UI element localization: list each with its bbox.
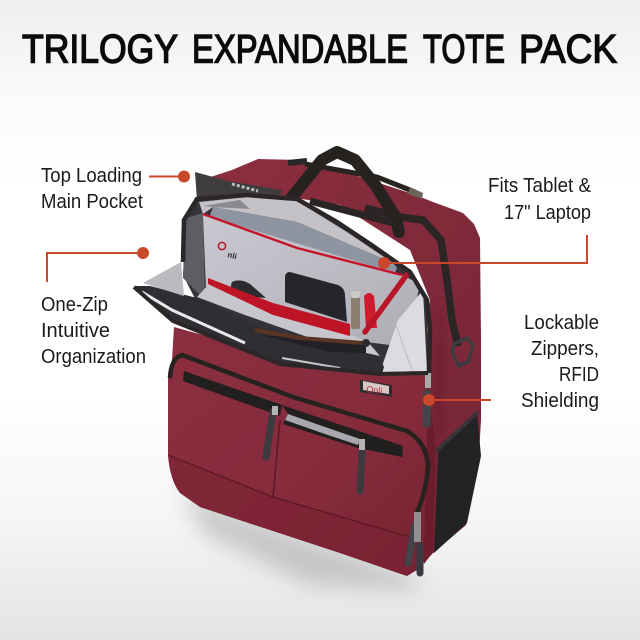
label text: One-Zip [41, 294, 108, 316]
flap zip edge [134, 287, 428, 374]
brand tag: Onli [366, 384, 383, 396]
interior rear lining [183, 196, 428, 372]
centre seam [273, 420, 280, 497]
front lower body [168, 327, 436, 576]
callout: lockable zippers, RFID shielding: Zippers, [531, 338, 599, 360]
title [22, 28, 617, 72]
device case [231, 280, 266, 298]
side panel fold shading [433, 300, 445, 440]
silver organizer sleeve [203, 215, 420, 345]
back lining [199, 197, 393, 263]
front pocket zip trim [170, 355, 428, 515]
bag shadow [180, 490, 425, 590]
bag side and top panels [195, 159, 481, 553]
silver pen [351, 291, 360, 329]
callout: lockable zippers, RFID shielding: Shielding [521, 390, 599, 412]
title: PACK [519, 28, 617, 72]
sleeve red piping [203, 214, 402, 275]
grey side lining [183, 213, 205, 300]
flap grey wedge [143, 262, 184, 296]
flap white binding [142, 292, 245, 343]
lining shadow fold [203, 200, 250, 209]
side zipper pulls [408, 525, 415, 563]
leader line [149, 176, 180, 178]
rear carry bar [305, 164, 415, 192]
phone [285, 272, 347, 322]
callout: lockable zippers, RFID shielding [423, 312, 599, 412]
label text: Top Loading [41, 165, 142, 187]
shoulder strap buckle [452, 338, 473, 366]
front pocket zip band left [183, 371, 282, 416]
opened flap [134, 286, 384, 374]
callout: lockable zippers, RFID shielding: RFID [559, 364, 599, 386]
leader line [384, 235, 587, 263]
laptop [209, 207, 397, 275]
callout: fits tablet and laptop [378, 175, 592, 269]
wrist strap [255, 330, 370, 353]
zipper pull left [266, 412, 273, 457]
backpack illustration [134, 152, 481, 576]
side zip trim [365, 208, 458, 346]
callout: one-zip intuitive organization: Intuitive [41, 320, 110, 342]
rear handle stub [288, 161, 307, 163]
red strap [365, 273, 408, 332]
title: TRILOGY [22, 28, 178, 72]
label text: Lockable [524, 312, 599, 334]
brand tag [360, 380, 392, 397]
side vertical band [424, 380, 436, 564]
leader line [47, 253, 140, 282]
base seam [168, 455, 410, 537]
callout: top loading main pocket [41, 165, 190, 213]
Onli interior logo [218, 242, 238, 261]
callout: one-zip intuitive organization [41, 247, 149, 368]
opening zip rim [183, 195, 430, 373]
Onli interior logo: nli [227, 250, 238, 261]
white corner lining [380, 290, 427, 372]
lower silver pocket [197, 285, 380, 356]
zipper pull right [360, 452, 362, 491]
pocket silver gusset [285, 414, 360, 445]
grey strap tab [408, 187, 423, 199]
callout: fits tablet and laptop: 17" Laptop [504, 202, 591, 224]
callout: one-zip intuitive organization: Organization [41, 346, 146, 368]
front pocket zip band right [282, 405, 403, 457]
top zipper [195, 172, 282, 200]
leader line [429, 399, 491, 401]
red pocket strip [208, 278, 350, 336]
top handle [292, 152, 399, 232]
red marker [364, 293, 377, 328]
title: TOTE [423, 28, 505, 72]
label text: Fits Tablet & [488, 175, 592, 197]
lock zipper pull [423, 393, 431, 424]
side mesh pocket [434, 413, 481, 553]
lower base shading [168, 455, 410, 576]
callout: top loading main pocket: Main Pocket [41, 191, 143, 213]
title: EXPANDABLE [192, 28, 408, 72]
